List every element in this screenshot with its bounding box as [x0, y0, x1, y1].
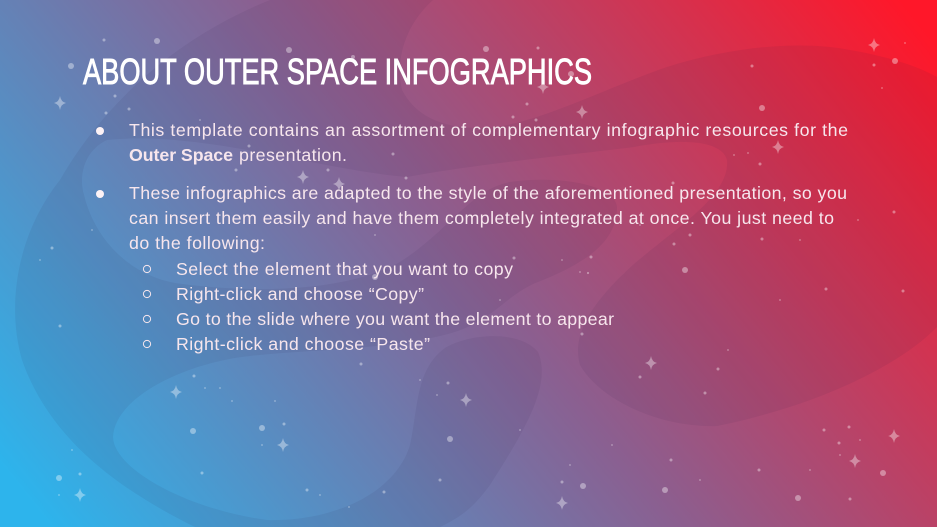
sub-list steps: Right-click and choose “Paste”: [176, 334, 430, 354]
sub-list steps: Go to the slide where you want the element to appear: [176, 309, 614, 329]
bullet 1: This template contains an assortment of complementary infographic resources for the: [129, 120, 848, 140]
bullet 2: [96, 183, 847, 253]
bullet list: [96, 120, 848, 354]
sub-list steps: Select the element that you want to copy: [176, 259, 513, 279]
bullet 2: can insert them easily and have them completely integrated at once. You just need to: [129, 208, 834, 228]
sub-list steps: [143, 259, 614, 354]
bullet 2: These infographics are adapted to the style of the aforementioned presentation, so you: [129, 183, 847, 203]
bullet 1: [96, 120, 848, 165]
sub-list steps: Right-click and choose “Copy”: [176, 284, 424, 304]
bullet 1: Outer Space: [129, 145, 233, 165]
bullet 1: presentation.: [239, 145, 347, 165]
title: ABOUT OUTER SPACE INFOGRAPHICS: [83, 51, 592, 92]
bullet 2: do the following:: [129, 233, 265, 253]
